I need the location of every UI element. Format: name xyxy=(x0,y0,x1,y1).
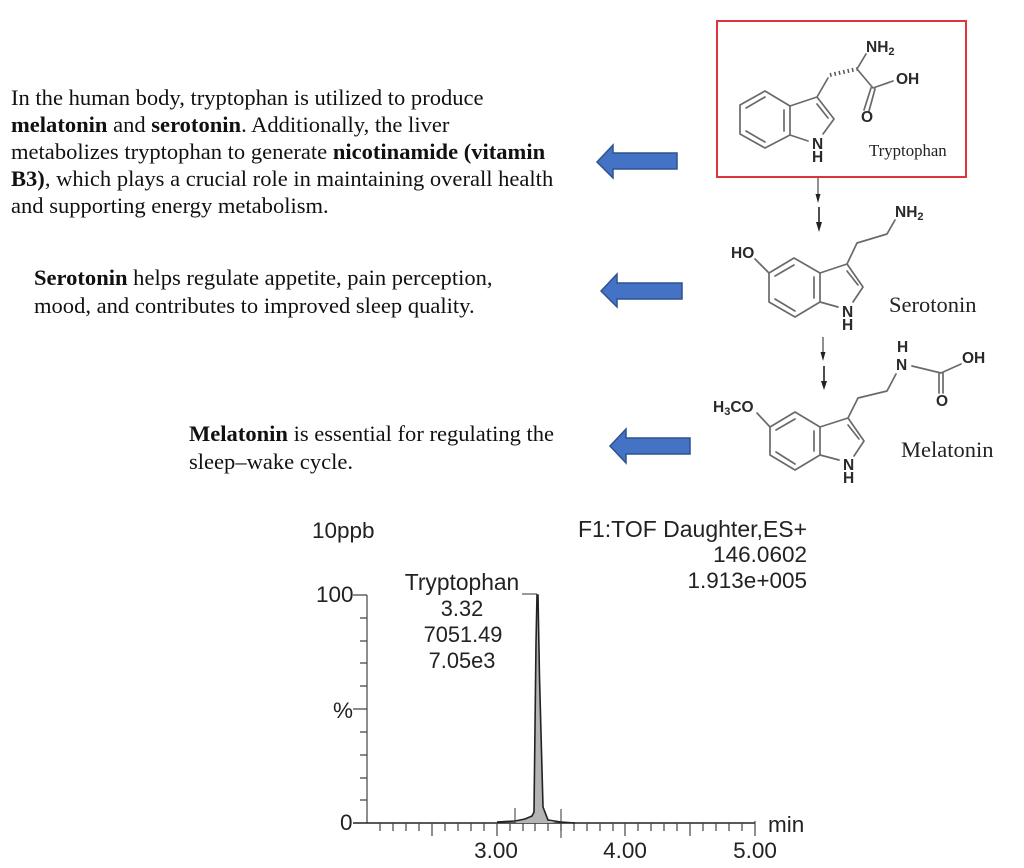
molecule: serotonin: HO xyxy=(731,245,754,262)
molecule: melatonin: 3 xyxy=(724,406,730,418)
label: Serotonin: Serotonin xyxy=(889,292,976,317)
molecule: tryptophan: H xyxy=(812,149,823,166)
molecule: melatonin: H xyxy=(897,339,908,356)
molecule: melatonin: H xyxy=(843,470,854,487)
chart header: scan details xyxy=(578,516,807,593)
text block: tryptophan description: metabolizes tryptophan to generate nicotinamide (vitamin xyxy=(11,139,546,164)
peak label: 7.05e3 xyxy=(429,648,495,673)
molecule: tryptophan: 2 xyxy=(888,46,895,58)
molecule: serotonin: 2 xyxy=(917,211,924,223)
text block: tryptophan description: melatonin and serotonin. Additionally, the liver xyxy=(11,112,450,137)
x axis: min xyxy=(768,812,804,837)
molecule: tryptophan: O xyxy=(861,109,873,126)
molecule: serotonin: NH xyxy=(895,204,917,221)
molecule: serotonin: H xyxy=(842,317,853,334)
text block: tryptophan description xyxy=(11,85,553,218)
label: Melatonin: Melatonin xyxy=(901,437,993,462)
molecule: melatonin: O xyxy=(936,393,948,410)
arrow: serotonin to melatonin xyxy=(820,337,827,390)
arrow: serotonin to description xyxy=(601,274,682,307)
text block: serotonin description: mood, and contributes to improved sleep quality. xyxy=(34,293,475,318)
peak label: Tryptophan xyxy=(405,569,519,595)
text block: tryptophan description: and supporting energy metabolism. xyxy=(11,193,329,218)
y axis: 0 xyxy=(340,810,353,835)
molecule: serotonin: N xyxy=(842,304,853,321)
chart header: scan details: F1:TOF Daughter,ES+ xyxy=(578,516,807,542)
peak label: 3.32 xyxy=(441,596,483,621)
molecule: tryptophan: N xyxy=(812,136,823,153)
text block: serotonin description: Serotonin helps regulate appetite, pain perception, xyxy=(34,265,493,290)
peak xyxy=(497,594,575,838)
chart: tryptophan chromatogram xyxy=(312,516,807,863)
molecule: serotonin xyxy=(731,204,924,334)
text block: melatonin description xyxy=(189,421,554,474)
x axis: 5.00 xyxy=(733,838,777,863)
peak label: 7051.49 xyxy=(424,622,502,647)
molecule: melatonin: H xyxy=(713,399,724,416)
molecule: tryptophan xyxy=(740,39,919,166)
text block: melatonin description: Melatonin is essential for regulating the xyxy=(189,421,554,446)
x axis xyxy=(353,812,804,863)
x axis: 4.00 xyxy=(603,838,647,863)
y axis: % xyxy=(333,698,353,723)
text block: tryptophan description: B3), which plays a crucial role in maintaining overall health xyxy=(11,166,553,191)
molecule: melatonin: OH xyxy=(962,350,985,367)
peak label xyxy=(405,569,519,673)
text block: serotonin description xyxy=(34,265,493,318)
molecule: melatonin: N xyxy=(843,457,854,474)
label: Tryptophan: Tryptophan xyxy=(869,141,947,160)
panel: tryptophan highlight box xyxy=(717,21,966,177)
molecule: melatonin xyxy=(713,339,985,487)
chart header: scan details: 1.913e+005 xyxy=(688,568,807,593)
arrow: melatonin to description xyxy=(610,429,690,463)
arrow: tryptophan to serotonin xyxy=(816,178,822,232)
chart header: sample name: 10ppb xyxy=(312,518,375,543)
y axis xyxy=(316,582,367,835)
molecule: tryptophan: OH xyxy=(896,71,919,88)
arrow: tryptophan to description xyxy=(597,145,677,178)
y axis: 100 xyxy=(316,582,354,607)
text block: melatonin description: sleep–wake cycle. xyxy=(189,449,353,474)
x axis: 3.00 xyxy=(474,838,518,863)
molecule: tryptophan: NH xyxy=(866,39,888,56)
molecule: melatonin: N xyxy=(896,357,907,374)
molecule: melatonin: CO xyxy=(730,399,754,416)
chart header: scan details: 146.0602 xyxy=(713,542,807,567)
text block: tryptophan description: In the human body, tryptophan is utilized to produce xyxy=(11,85,484,110)
